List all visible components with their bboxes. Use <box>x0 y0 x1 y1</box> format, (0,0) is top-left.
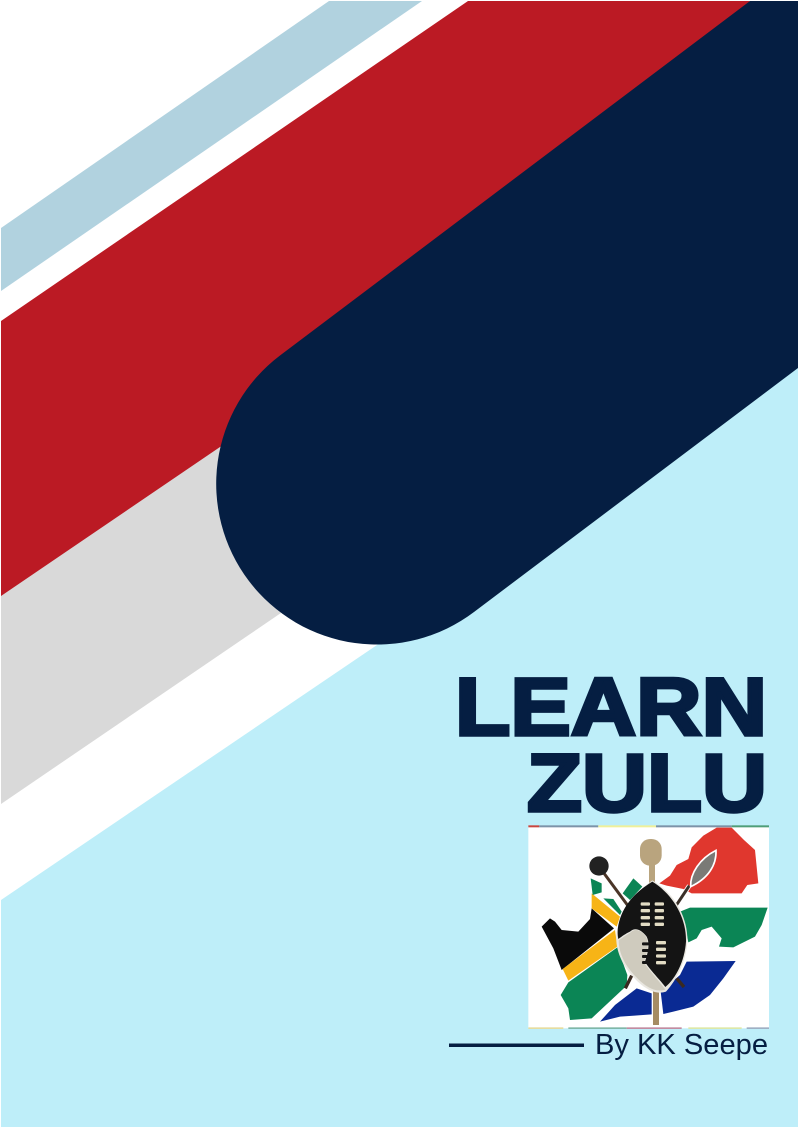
author credit: By KK Seepe <box>595 1029 768 1061</box>
knobkerrie stick <box>589 856 632 988</box>
navy rounded capsule <box>216 1 798 645</box>
map: lower yellow stripe <box>563 930 617 981</box>
Zulu shield <box>616 880 687 993</box>
emblem bottom colour strip <box>528 1027 769 1029</box>
red diagonal band <box>1 1 750 596</box>
emblem: South African flag map with Zulu shield <box>528 825 769 1029</box>
central pole with tan head <box>640 839 662 1025</box>
emblem white background <box>528 826 769 1028</box>
map: blue right region <box>661 961 736 1014</box>
grey diagonal band <box>1 370 500 804</box>
map: black region <box>542 908 614 970</box>
spear <box>676 850 716 987</box>
map: upper yellow stripe <box>592 893 620 927</box>
map: green right region <box>680 908 768 947</box>
light cyan lower background <box>1 368 798 1127</box>
pale blue diagonal band <box>1 1 422 291</box>
title line: ZULU: ZULU <box>527 738 767 829</box>
emblem top colour strip <box>528 825 769 827</box>
map: green upper-left pieces <box>591 878 642 915</box>
map: green lower-left region <box>561 947 627 1020</box>
map: red region <box>659 828 758 893</box>
map: blue left region <box>600 988 652 1022</box>
title: Learn Zulu <box>455 662 767 829</box>
title line: LEARN: LEARN <box>455 662 767 753</box>
author rule <box>449 1044 584 1047</box>
